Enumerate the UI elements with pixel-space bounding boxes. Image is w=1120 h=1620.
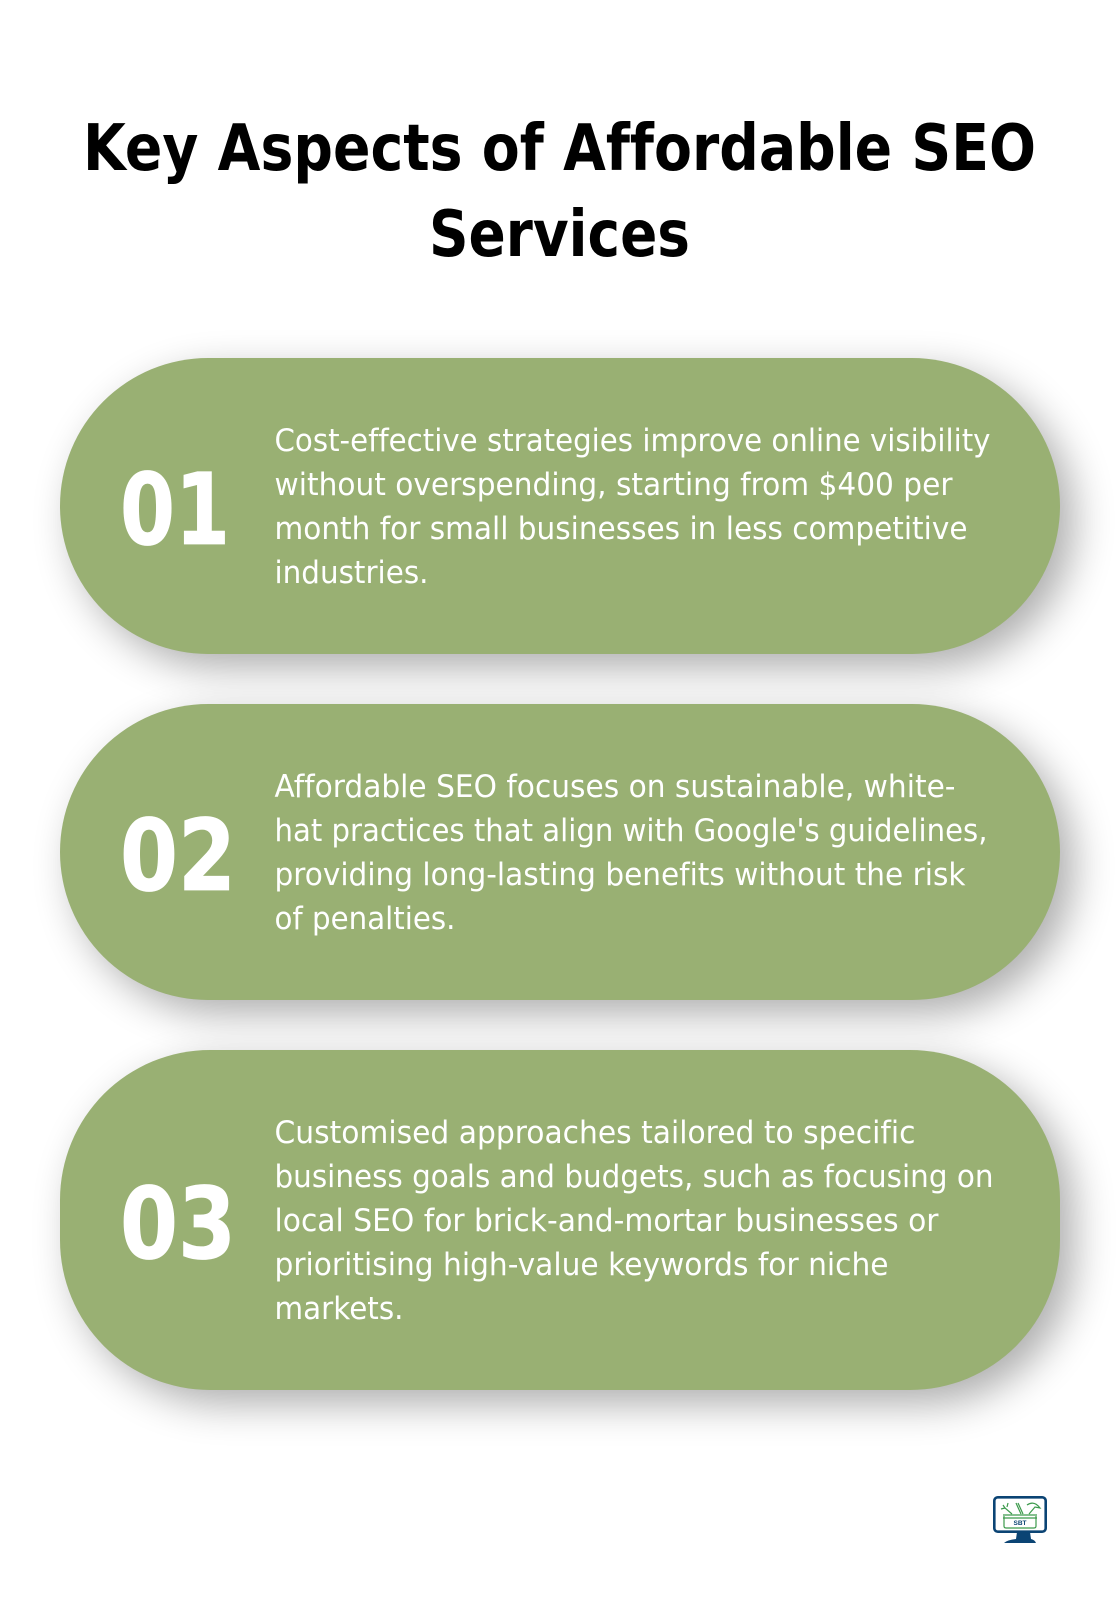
text: cost-effective strategies: month for small businesses in less competitive xyxy=(274,511,968,547)
title: Services xyxy=(429,198,690,272)
icon: monitor logo with toolbox: SBT xyxy=(1014,1520,1027,1527)
panel: card 02 xyxy=(60,704,1060,1000)
text: cost-effective strategies: without overspending, starting from $400 per xyxy=(274,467,953,503)
text: white-hat practices: of penalties. xyxy=(274,901,456,937)
text: customised approaches: local SEO for brick-and-mortar businesses or xyxy=(274,1203,939,1239)
text: customised approaches: prioritising high-value keywords for niche xyxy=(274,1247,888,1283)
text: white-hat practices: hat practices that align with Google's guidelines, xyxy=(274,813,988,849)
panel: card 01 xyxy=(60,358,1060,654)
title xyxy=(83,112,1036,272)
text: cost-effective strategies: Cost-effective strategies improve online visibility xyxy=(274,423,990,459)
text: customised approaches: markets. xyxy=(274,1291,404,1327)
text: customised approaches: Customised approaches tailored to specific xyxy=(274,1115,916,1151)
text: white-hat practices: providing long-lasting benefits without the risk xyxy=(274,857,966,893)
text: cost-effective strategies: industries. xyxy=(274,555,428,591)
panel: card 03 xyxy=(60,1050,1060,1390)
text: white-hat practices xyxy=(274,769,988,937)
text: cost-effective strategies xyxy=(274,423,990,591)
text: white-hat practices: Affordable SEO focuses on sustainable, white- xyxy=(274,769,956,805)
text: customised approaches: business goals and budgets, such as focusing on xyxy=(274,1159,994,1195)
icon: monitor logo with toolbox xyxy=(993,1496,1047,1543)
text: customised approaches xyxy=(274,1115,994,1327)
